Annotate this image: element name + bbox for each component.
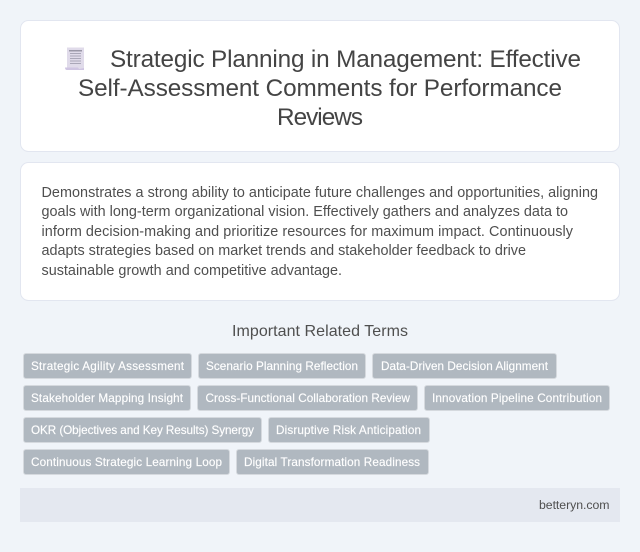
tag: strategic agility: Strategic Agility Assessment xyxy=(31,360,185,373)
tag: okr: OKR (Objectives and Key Results) Synergy xyxy=(31,424,254,437)
tag: disruptive risk: Disruptive Risk Anticipation xyxy=(276,424,421,437)
tag list xyxy=(24,354,610,474)
tag: stakeholder mapping: Stakeholder Mapping Insight xyxy=(31,392,184,405)
tag: digital transformation xyxy=(236,450,428,474)
footer brand: betteryn.com xyxy=(539,498,610,512)
tag: cross-functional xyxy=(198,386,418,410)
tag: stakeholder mapping xyxy=(24,386,190,410)
tag: continuous learning xyxy=(24,450,230,474)
panel: summary card xyxy=(20,162,620,300)
title: Self-Assessment Comments for Performance xyxy=(78,75,562,102)
summary text xyxy=(42,185,598,279)
tag: strategic agility xyxy=(24,354,192,378)
tag: cross-functional: Cross-Functional Collaboration Review xyxy=(206,392,411,405)
tag: data-driven xyxy=(372,354,556,378)
summary text: inform decision-making and prioritize resources for maximum impact. Continuously xyxy=(42,224,574,240)
tag: data-driven: Data-Driven Decision Alignment xyxy=(381,360,549,373)
tag: continuous learning: Continuous Strategic Learning Loop xyxy=(31,456,222,469)
title xyxy=(78,46,581,131)
footer xyxy=(20,488,620,522)
panel: title card xyxy=(20,20,620,152)
summary text: Demonstrates a strong ability to anticipate future challenges and opportunities, aligning xyxy=(42,185,598,201)
icon: document scroll xyxy=(65,48,84,70)
tag: digital transformation: Digital Transformation Readiness xyxy=(244,456,420,469)
tag: scenario planning xyxy=(198,354,366,378)
summary text: goals with long-term organizational vision. Effectively gathers and analyzes data to xyxy=(42,204,568,220)
tag: innovation pipeline: Innovation Pipeline Contribution xyxy=(432,392,602,405)
summary text: sustainable growth and competitive advantage. xyxy=(42,263,342,279)
title: Strategic Planning in Management: Effective xyxy=(110,46,581,73)
tag: okr xyxy=(24,418,262,442)
tag: scenario planning: Scenario Planning Reflection xyxy=(206,360,358,373)
title: Reviews xyxy=(277,104,363,131)
heading: important related terms: Important Related Terms xyxy=(232,323,408,340)
tag: innovation pipeline xyxy=(424,386,610,410)
tag: disruptive risk xyxy=(268,418,430,442)
summary text: adapts strategies based on market trends and stakeholder feedback to drive xyxy=(42,243,526,259)
